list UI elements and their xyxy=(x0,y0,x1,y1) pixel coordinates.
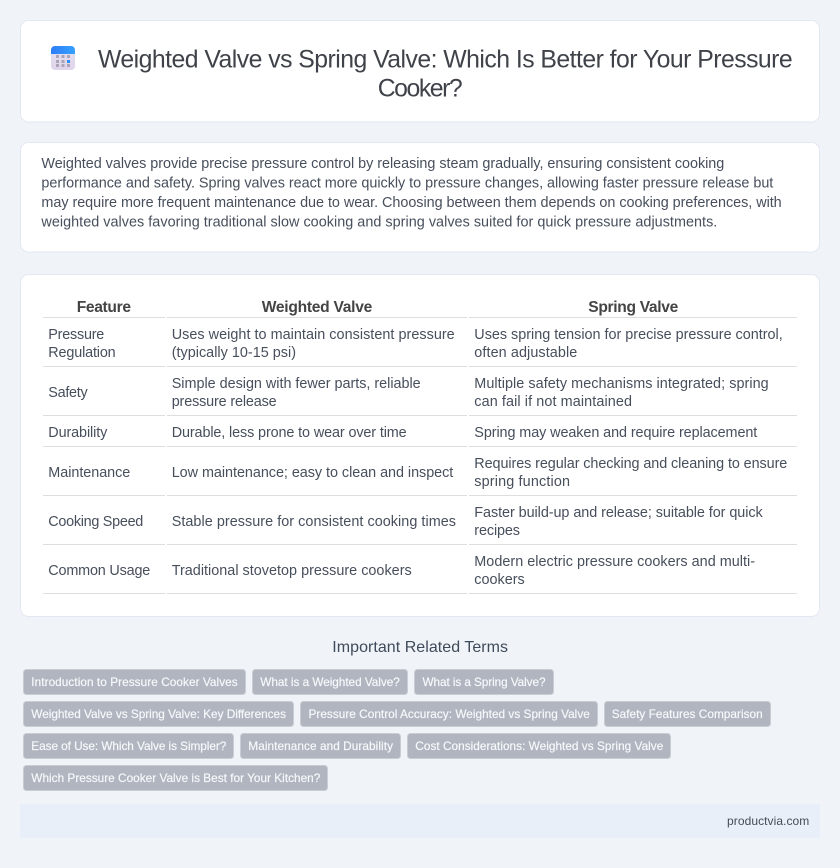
chip xyxy=(24,766,328,790)
row: Pressure Regulation: (typically 10-15 psi) xyxy=(172,345,296,361)
summary text: performance and safety. Spring valves react more quickly to pressure changes, allowing faster pressure release but xyxy=(41,176,773,192)
row: Common Usage: Traditional stovetop pressure cookers xyxy=(172,563,412,579)
row: Safety: Safety xyxy=(48,385,88,401)
chip: Introduction to Pressure Cooker Valves xyxy=(31,675,238,689)
row: Durability: Durable, less prone to wear over time xyxy=(172,425,407,441)
table header row: Weighted Valve xyxy=(262,299,373,316)
row: Durability: Durability xyxy=(48,425,108,441)
row: Maintenance: Maintenance xyxy=(48,465,130,481)
chip: Safety Features Comparison xyxy=(612,707,763,721)
chip: What is a Weighted Valve? xyxy=(260,675,400,689)
footer xyxy=(20,804,820,838)
row: Maintenance xyxy=(48,456,787,490)
row: Cooking Speed: Stable pressure for consistent cooking times xyxy=(172,514,456,530)
chip xyxy=(414,670,554,694)
summary text xyxy=(40,156,782,230)
row: Common Usage: Common Usage xyxy=(48,563,150,579)
row: Safety: pressure release xyxy=(172,394,277,410)
row: Cooking Speed: Faster build-up and release; suitable for quick xyxy=(474,505,763,521)
chip xyxy=(240,734,400,758)
summary text: may require more frequent maintenance due to wear. Choosing between them depends on cooking preferences, with xyxy=(41,195,782,211)
row: Pressure Regulation: Uses weight to maintain consistent pressure xyxy=(172,327,455,343)
row: Pressure Regulation xyxy=(48,327,783,361)
panel: summary paragraph xyxy=(20,142,820,252)
row: Pressure Regulation: Uses spring tension for precise pressure control, xyxy=(474,327,783,343)
row: Pressure Regulation: Pressure xyxy=(48,327,104,343)
row: Maintenance: Low maintenance; easy to clean and inspect xyxy=(172,465,453,481)
row: Common Usage: Modern electric pressure cookers and multi- xyxy=(474,554,755,570)
row: Durability xyxy=(48,425,757,441)
chip: Which Pressure Cooker Valve is Best for Your Kitchen? xyxy=(31,771,321,785)
summary text: Weighted valves provide precise pressure control by releasing steam gradually, ensuring consistent cooking xyxy=(41,156,724,172)
heading: related terms: Important Related Terms xyxy=(332,639,508,656)
chip xyxy=(24,670,246,694)
title: Cooker? xyxy=(378,76,463,102)
panel: comparison table xyxy=(20,274,820,616)
row: Cooking Speed: recipes xyxy=(474,523,520,539)
chip xyxy=(24,702,294,726)
chip xyxy=(252,670,408,694)
chip: Cost Considerations: Weighted vs Spring Valve xyxy=(415,739,664,753)
title xyxy=(98,46,793,102)
row: Pressure Regulation: Regulation xyxy=(48,345,116,361)
row: Common Usage xyxy=(48,554,755,588)
row: Maintenance: Requires regular checking and cleaning to ensure xyxy=(474,456,787,472)
row: Safety xyxy=(48,376,769,410)
table header row: Feature xyxy=(77,299,131,316)
summary text: weighted valves favoring traditional slow cooking and spring valves suited for quick pressure adjustments. xyxy=(40,214,717,230)
row: Pressure Regulation: often adjustable xyxy=(474,345,577,361)
row: Durability: Spring may weaken and require replacement xyxy=(474,425,757,441)
row: Safety: Multiple safety mechanisms integrated; spring xyxy=(474,376,769,392)
table header row: Spring Valve xyxy=(588,299,679,316)
chip xyxy=(408,734,670,758)
panel: header xyxy=(20,20,820,122)
row: Cooking Speed: Cooking Speed xyxy=(48,514,143,530)
related term chips xyxy=(24,670,770,790)
row: Safety: can fail if not maintained xyxy=(474,394,632,410)
chip xyxy=(604,702,770,726)
chip xyxy=(24,734,234,758)
row: Maintenance: spring function xyxy=(474,474,570,490)
row: Cooking Speed xyxy=(48,505,763,539)
chip: Ease of Use: Which Valve is Simpler? xyxy=(31,739,227,753)
title: Weighted Valve vs Spring Valve: Which Is Better for Your Pressure xyxy=(98,46,793,74)
footer source text: productvia.com xyxy=(727,814,809,828)
chip: Maintenance and Durability xyxy=(248,739,393,753)
row: Safety: Simple design with fewer parts, reliable xyxy=(172,376,421,392)
row: Common Usage: cookers xyxy=(474,572,525,588)
table header row xyxy=(77,299,679,316)
chip: What is a Spring Valve? xyxy=(422,675,546,689)
icon: calendar xyxy=(51,46,75,70)
chip xyxy=(300,702,598,726)
chip: Weighted Valve vs Spring Valve: Key Differences xyxy=(31,707,286,721)
chip: Pressure Control Accuracy: Weighted vs Spring Valve xyxy=(308,707,590,721)
